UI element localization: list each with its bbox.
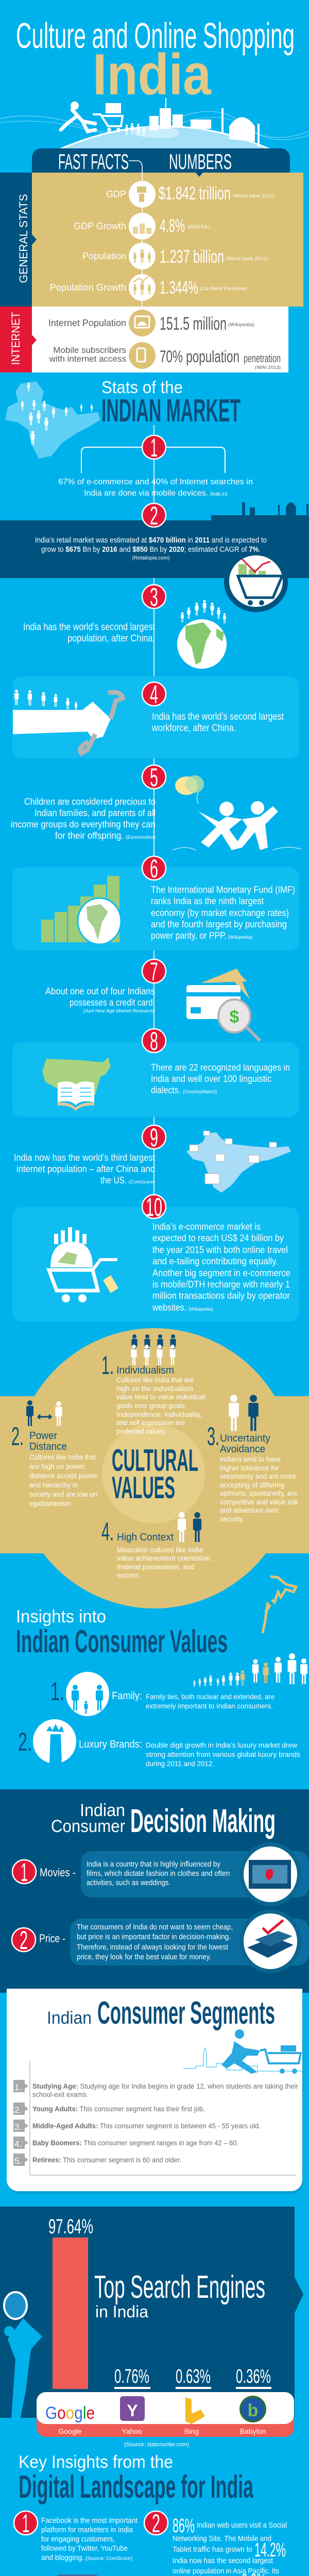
- fast facts header tab: [32, 148, 290, 174]
- insight 2: Networking Site. The Mobile and: [173, 2534, 271, 2543]
- value: uncertainty avoidance: uncertainty and are more: [220, 1472, 296, 1480]
- consumer value: family: 1.: [50, 1677, 64, 1706]
- panel: fact 8: There are 22 recognized languages in: [151, 1062, 290, 1073]
- value: high context: material possessions, and: [117, 1563, 194, 1571]
- number markers 1-10: 7: [150, 957, 158, 986]
- insight 1: 1: [22, 2509, 29, 2538]
- number markers 1-10: 9: [150, 1123, 158, 1152]
- value: individualism: high on the individualism: [116, 1385, 193, 1393]
- stat: internet population: (Wikipedia): [228, 322, 254, 328]
- insight 1: for engaging customers,: [41, 2535, 115, 2544]
- fact 3: population, after China.: [67, 633, 155, 644]
- icon: people row: [194, 1653, 307, 1687]
- fact 5: Children are considered precious to: [24, 796, 156, 807]
- stat: GDP: GDP: [106, 189, 126, 199]
- stat: mobile subscribers: with internet access: [49, 354, 126, 364]
- value: uncertainty avoidance: and adventure over: [220, 1506, 279, 1514]
- value: uncertainty avoidance: higher tolerance for: [220, 1464, 279, 1472]
- bar chart: search engines: 0.63%: [176, 2366, 211, 2387]
- decision: movies: 1: [21, 1858, 28, 1887]
- fact 1 text: (trak.in): [210, 492, 228, 497]
- number markers 1-10: 8: [150, 1027, 158, 1056]
- fact 1 text: [58, 478, 253, 498]
- number markers 1-10: 5: [150, 763, 158, 792]
- number markers 1-10: 10: [146, 1193, 162, 1222]
- fact 7: possesses a credit card.: [70, 997, 155, 1008]
- value: high context: success.: [117, 1571, 140, 1579]
- fact 7: [45, 986, 155, 1014]
- stat: population growth: 1.344%: [160, 278, 198, 298]
- value: uncertainty avoidance: opinions, spontaneity, are: [220, 1489, 297, 1497]
- stat: GDP growth: [74, 213, 210, 240]
- fact 1 text: 67% of e-commerce and 40% of Internet searches in: [58, 478, 253, 486]
- number markers 1-10: 3: [150, 583, 158, 612]
- timeline line: [153, 425, 154, 1206]
- fact 9: the US.: [100, 1175, 127, 1185]
- consumer value: luxury brands: strong attention from various global luxury brands: [146, 1751, 300, 1758]
- icon: india map with people: [5, 381, 100, 459]
- stat: population: Population: [82, 251, 126, 261]
- value: power distance: and hierarchy in: [29, 1481, 78, 1489]
- consumer value: luxury brands: [18, 1719, 300, 1768]
- icon: credit card and magnifier: $: [230, 1007, 239, 1027]
- value: uncertainty avoidance: Avoidance: [220, 1444, 265, 1455]
- insight 2: 2: [152, 2509, 160, 2538]
- stat: population: (World bank 2012): [226, 256, 268, 262]
- value: high context: 4.: [101, 1517, 114, 1546]
- value: power distance: Cultures like India that: [29, 1453, 96, 1461]
- value: uncertainty avoidance: competitive and value risk: [220, 1498, 298, 1506]
- consumer value: family: [50, 1672, 274, 1716]
- decision: price: [12, 1909, 309, 1973]
- value: individualism: and self expression are: [116, 1419, 185, 1427]
- panel: fact 10: million transactions daily by operator: [152, 1290, 290, 1301]
- bracket: [81, 447, 225, 473]
- insight 1: (Source: ComScore): [85, 2556, 132, 2562]
- consumer value: luxury brands: during 2011 and 2012.: [146, 1760, 214, 1768]
- value: high context: High Context: [117, 1532, 174, 1543]
- insight 2: 14.2%: [254, 2539, 286, 2561]
- icon: credit card and magnifier: [186, 969, 260, 1041]
- stat: population growth: [50, 274, 247, 301]
- heading: insights into indian consumer values: Insights into: [16, 1607, 106, 1626]
- panel: fact 10: India’s e-commerce market is: [152, 1221, 261, 1232]
- fact 5: (Euromonitor): [126, 835, 156, 840]
- decision: movies: India is a country that is highly influenced by: [87, 1860, 221, 1869]
- fact 7: (Juxt New Age Market Research): [83, 1008, 155, 1014]
- stat: mobile subscribers: 70% population: [160, 347, 239, 366]
- fact 9: internet population – after China and: [16, 1163, 155, 1174]
- stat: population: 1.237 billion: [160, 247, 224, 267]
- heading: cultural values: CULTURAL: [112, 1443, 198, 1478]
- stat: population: [82, 243, 268, 269]
- icon: balloons and children: [173, 775, 301, 850]
- value: individualism: 1.: [101, 1351, 114, 1380]
- segment list: school-exit exams.: [32, 2091, 88, 2098]
- value: individualism: goals over group goals.: [116, 1402, 186, 1410]
- value: individualism: Cultures like India that are: [116, 1376, 194, 1384]
- decision: movies: films, which dictate fashion in clothes and often: [87, 1870, 230, 1878]
- search engine logos: Google: [58, 2427, 82, 2435]
- value: high context: [101, 1512, 212, 1579]
- fast facts header tab: FAST FACTS: [58, 149, 129, 174]
- value: uncertainty avoidance: security.: [220, 1515, 244, 1523]
- decision: price: Therefore, instead of always looking for the lowest: [77, 1943, 228, 1952]
- fact 5: for their offspring.: [55, 830, 124, 841]
- bar chart: search engines: [48, 2215, 271, 2389]
- consumer value: family: Family ties, both nuclear and extended, are: [146, 1693, 274, 1701]
- icon: magnifier person: [4, 2292, 42, 2418]
- value: high context: Masculine cultures like India: [117, 1546, 203, 1554]
- decision: movies: Movies -: [40, 1866, 76, 1879]
- value: power distance: Power: [29, 1430, 57, 1442]
- skyline silhouette: [211, 502, 309, 520]
- panel: internet: [0, 307, 288, 372]
- search engine logos: Babylon: [240, 2427, 266, 2435]
- fact 3: India has the world’s second largest: [23, 622, 156, 633]
- panel: fact 8: India and well over 100 linguistic: [151, 1073, 271, 1084]
- segment list: 3.: [14, 2122, 22, 2132]
- stat: mobile subscribers: penetration: [244, 352, 281, 365]
- insight 2: Tablet traffic has grown to: [173, 2545, 252, 2554]
- bar chart: search engines: 0.76%: [114, 2366, 149, 2387]
- panel: decision making: [0, 1789, 309, 1993]
- consumer value: luxury brands: Double digit growth in India’s luxury market drew: [146, 1741, 297, 1749]
- fact 9: India now has the world’s third largest: [14, 1152, 155, 1163]
- panel: fact 6: power parity, or PPP.: [151, 930, 227, 941]
- panel: fact 10: websites.: [152, 1302, 186, 1313]
- value: uncertainty avoidance: 3.: [207, 1422, 219, 1451]
- consumer value: family: extremely important to Indian consumers.: [146, 1702, 273, 1710]
- segment list: Middle-Aged Adults: This consumer segment is between 45 - 55 years old.: [32, 2122, 261, 2130]
- fact 5: Indian families, and parents of all: [35, 807, 156, 818]
- decision: price: 2: [20, 1926, 28, 1955]
- panel: top search engines: [0, 2207, 303, 2418]
- stat: mobile subscribers: (IMAI 2013): [255, 365, 281, 370]
- value: power distance: society and are low on: [29, 1490, 97, 1498]
- heading: consumer segments: [47, 1995, 275, 2031]
- search engine logos: b: [248, 2401, 258, 2420]
- stat: population growth: (Cia World Facebook): [200, 286, 247, 292]
- value: power distance: are high on power: [29, 1462, 85, 1470]
- decision: price: but price is an important factor in decision-making.: [77, 1933, 231, 1941]
- panel: fact 10: and e-tailing contributing equally.: [152, 1256, 278, 1266]
- segment list: 2.: [14, 2105, 22, 2115]
- heading: stats of the indian market: Stats of the: [101, 378, 183, 397]
- segment list: Baby Boomers: This consumer segment ranges in age from 42 – 60.: [32, 2139, 238, 2147]
- decision: price: price, they look for the best value for money.: [77, 1953, 211, 1961]
- segment list: Studying Age: Studying age for India begins in grade 12, when students are taking their: [32, 2082, 298, 2090]
- segment list: 4.: [14, 2139, 22, 2149]
- panel: fact 4: India has the world’s second largest: [152, 711, 284, 722]
- number markers 1-10: 4: [150, 680, 158, 709]
- source: statcounter: (Source: statcounter.com): [124, 2442, 189, 2448]
- segment list: 1.: [14, 2082, 22, 2092]
- heading: cultural values: [112, 1449, 198, 1498]
- value: power distance: egalitarianism.: [29, 1499, 73, 1507]
- search engine logos: Bing: [184, 2427, 199, 2435]
- panel: fact 10: [12, 1207, 299, 1321]
- panel: retail market band: (Retailopia.com): [132, 555, 169, 561]
- search engine logos: [37, 2392, 294, 2437]
- panel: fact 8: dialects.: [151, 1084, 181, 1095]
- connector line: [129, 160, 143, 307]
- stat: GDP: (World bank 2012): [233, 193, 274, 199]
- stat: internet population: 151.5 million: [160, 314, 227, 334]
- insight 2: India now has the second largest: [173, 2556, 273, 2565]
- value: uncertainty avoidance: Indians tend to have: [220, 1455, 281, 1463]
- heading: stats of the indian market: [102, 381, 241, 421]
- panel: general stats: GENERAL STATS: [17, 194, 30, 283]
- title: [17, 22, 294, 95]
- fast facts header tab: NUMBERS: [169, 149, 232, 174]
- value: uncertainty avoidance: Uncertainty: [220, 1433, 270, 1444]
- insight 2: online population in Asia Pacific. Its: [173, 2567, 279, 2575]
- fact 3: [23, 622, 156, 644]
- insight 1: followed by Twitter, YouTube: [41, 2544, 128, 2553]
- fact 5: [11, 796, 156, 841]
- value: power distance: [11, 1400, 97, 1507]
- panel: fact 4: workforce, after China.: [151, 723, 236, 734]
- bar chart: search engines: 97.64%: [48, 2215, 93, 2238]
- panel: fact 8: (CountryWatch): [183, 1089, 217, 1095]
- decision: movies: [12, 1842, 309, 1906]
- panel: fact 6: and the fourth largest by purchasing: [151, 919, 287, 929]
- icon: puppeteer hand: [263, 1577, 296, 1633]
- segment list: [13, 2080, 298, 2166]
- panel: fact 6: ranks India as the ninth largest: [151, 895, 264, 906]
- heading: decision making: [51, 1801, 276, 1839]
- heading: top search engines: in India: [95, 2302, 148, 2321]
- panel: fact 10: the year 2015 with both online travel: [152, 1244, 288, 1255]
- fact 9: [14, 1152, 155, 1185]
- insight 1: [14, 2509, 138, 2562]
- panel: fact 10: expected to reach US$ 24 billion by: [152, 1232, 284, 1243]
- stat: internet population: [48, 310, 254, 336]
- value: uncertainty avoidance: [207, 1395, 298, 1523]
- value: power distance: Distance: [29, 1441, 67, 1452]
- number markers 1-10: 1: [150, 433, 158, 462]
- number markers 1-10: 2: [150, 501, 158, 530]
- search engine logos: Yahoo: [122, 2427, 142, 2435]
- fact 7: About one out of four Indians: [45, 986, 155, 996]
- value: uncertainty avoidance: accepting of differing: [220, 1481, 284, 1489]
- panel: fact 10: (Wikipedia): [188, 1307, 213, 1312]
- stat: mobile subscribers: [49, 342, 281, 370]
- panel: fact 4: [12, 676, 299, 758]
- heading: decision making: Consumer: [51, 1817, 125, 1836]
- value: power distance: distance accept power: [29, 1471, 97, 1480]
- stat: GDP: [106, 181, 274, 208]
- fact 1 text: India are done via mobile devices.: [84, 489, 208, 498]
- stat: GDP growth: 4.8%: [160, 216, 185, 236]
- panel: cultural values: [0, 1328, 309, 1608]
- number markers 1-10: [142, 433, 166, 1222]
- icon: india network map: [186, 1131, 291, 1193]
- heading: consumer segments: Indian: [47, 2008, 92, 2028]
- icons: social media cluster: [54, 2574, 122, 2576]
- panel: fact 8: [12, 1042, 299, 1117]
- panel: fact 6: [12, 867, 299, 951]
- decision: price: Price -: [39, 1932, 65, 1945]
- icon: runner with cart: [183, 2029, 302, 2074]
- panel: retail market band: [0, 520, 309, 578]
- stat: GDP growth: GDP Growth: [74, 221, 126, 231]
- insight 2: [144, 2509, 287, 2576]
- stat: GDP growth: (2013 Est.): [188, 224, 210, 230]
- panel: fact 10: Another big segment in e-commerce: [152, 1267, 290, 1278]
- value: individualism: Individualism: [116, 1365, 174, 1376]
- panel: general stats: [0, 173, 303, 307]
- consumer value: luxury brands: 2.: [18, 1727, 32, 1756]
- heading: cultural values: VALUES: [112, 1470, 175, 1505]
- segment list: Young Adults: This consumer segment has their first job.: [32, 2105, 205, 2113]
- consumer value: luxury brands: Luxury Brands:: [79, 1739, 142, 1750]
- hero illustration: shopper, skyline and globe: [0, 98, 309, 149]
- heading: digital landscape: Key Insights from the: [19, 2452, 173, 2472]
- segment list: 5.: [14, 2156, 22, 2166]
- search engine logos: Google: [45, 2403, 95, 2423]
- value: individualism: preferred values.: [116, 1428, 167, 1435]
- decision: movies: activities, such as weddings.: [87, 1879, 170, 1887]
- insight 1: platform for marketers in India: [41, 2526, 133, 2534]
- heading: decision making: Indian: [80, 1801, 125, 1820]
- bar chart: search engines: 0.36%: [236, 2366, 271, 2387]
- number markers 1-10: 6: [150, 854, 158, 883]
- panel: consumer segments: [7, 1989, 303, 2194]
- panel: internet: INTERNET: [9, 312, 22, 365]
- stat: GDP: $1.842 trillion: [159, 183, 231, 204]
- icon: shopping cart growth: [224, 552, 288, 612]
- heading: insights into indian consumer values: [16, 1607, 228, 1659]
- value: power distance: 2.: [11, 1422, 24, 1451]
- value: individualism: value tend to value individual: [116, 1393, 205, 1401]
- value: high context: value achievement orientation,: [117, 1554, 212, 1562]
- search engine logos: Y: [127, 2401, 138, 2420]
- value: individualism: Independence, individuality,: [116, 1411, 202, 1418]
- title: India: [93, 42, 212, 107]
- icon: globe with people: [177, 600, 227, 669]
- consumer value: family: Family:: [112, 1690, 142, 1702]
- stat: population growth: Population Growth: [50, 282, 126, 293]
- heading: digital landscape: [19, 2452, 253, 2505]
- panel: fact 6: economy (by market exchange rates): [151, 907, 289, 918]
- panel: fact 10: is mobile/DTH recharge with nearly 1: [152, 1279, 290, 1290]
- panel: retail market band: India’s retail market was estimated at $470 billion in 2011 and is expected to: [35, 536, 267, 545]
- stat: mobile subscribers: Mobile subscribers: [53, 345, 126, 355]
- stat: internet population: Internet Population: [48, 318, 126, 328]
- fact 9: (ComScore): [129, 1179, 155, 1185]
- fact 5: income groups do everything they can: [11, 819, 156, 829]
- insight 2: 86%: [173, 2515, 195, 2537]
- heading: top search engines: [94, 2269, 265, 2321]
- segment list: Retirees: This consumer segment is 60 and older.: [32, 2156, 181, 2164]
- insight 2: Indian web users visit a Social: [197, 2521, 287, 2530]
- panel: fact 6: (Wikipedia): [228, 935, 253, 940]
- insight 1: and blogging.: [41, 2553, 84, 2562]
- insight 1: Facebook is the most important: [41, 2516, 138, 2525]
- value: individualism: [101, 1334, 205, 1435]
- decision: price: The consumers of India do not want to seem cheap,: [77, 1923, 233, 1931]
- panel: retail market band: grow to $675 Bn by 2016 and $850 Bn by 2020; estimated CAGR of 7%.: [41, 545, 261, 554]
